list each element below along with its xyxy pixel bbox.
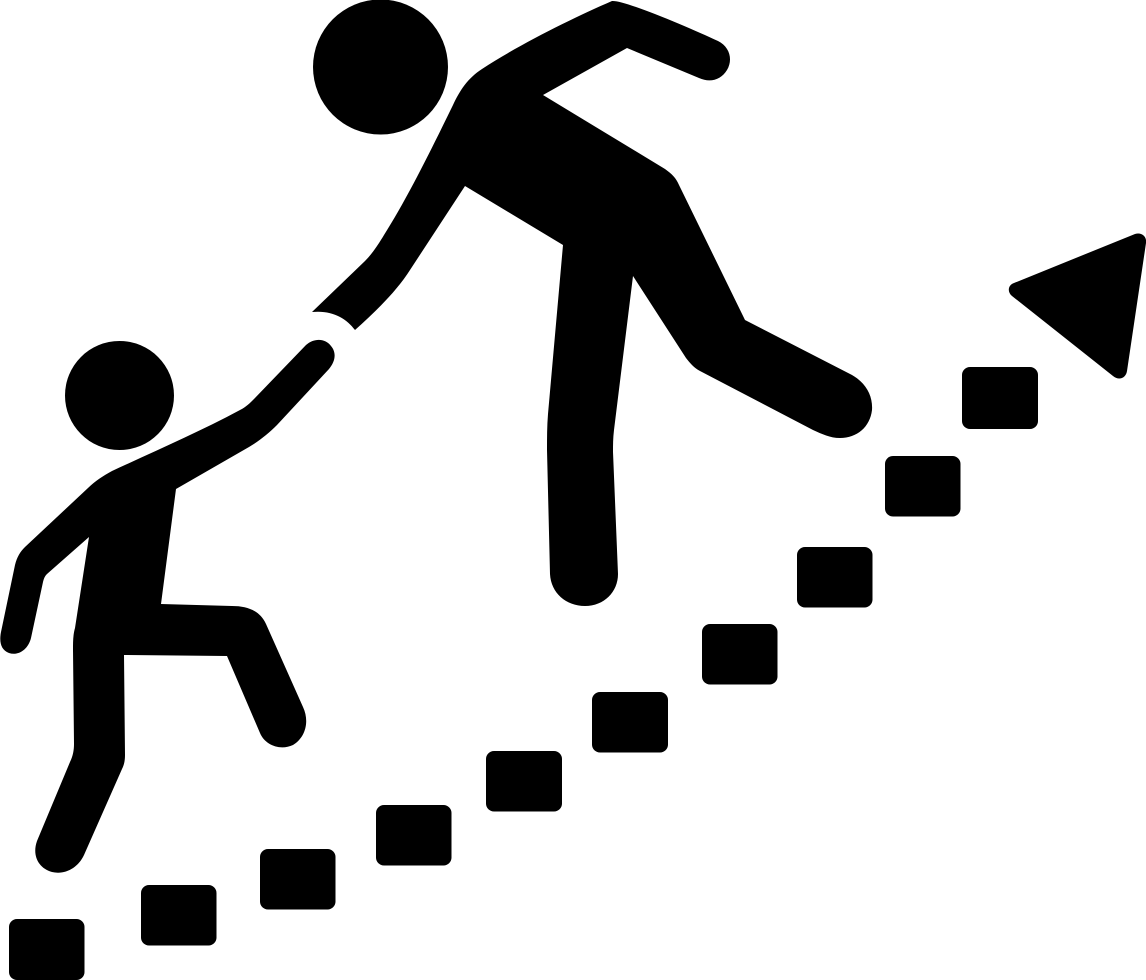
icon: lower figure head bbox=[65, 341, 174, 450]
step 10 bbox=[962, 367, 1038, 429]
icon: upper figure head bbox=[313, 0, 448, 134]
icon: upper figure body bbox=[312, 1, 872, 606]
step 4 bbox=[376, 805, 452, 866]
step 6 bbox=[592, 692, 668, 752]
step 7 bbox=[702, 624, 778, 684]
icon: lower figure body bbox=[0, 340, 335, 873]
step 3 bbox=[260, 849, 336, 910]
arrow: triangle pointing up the stairs bbox=[1009, 233, 1146, 378]
step 8 bbox=[797, 547, 872, 608]
step 9 bbox=[885, 456, 960, 516]
step 1 bbox=[9, 919, 84, 980]
step 5 bbox=[486, 751, 562, 812]
step 2 bbox=[141, 885, 216, 946]
steps bbox=[9, 367, 1038, 980]
